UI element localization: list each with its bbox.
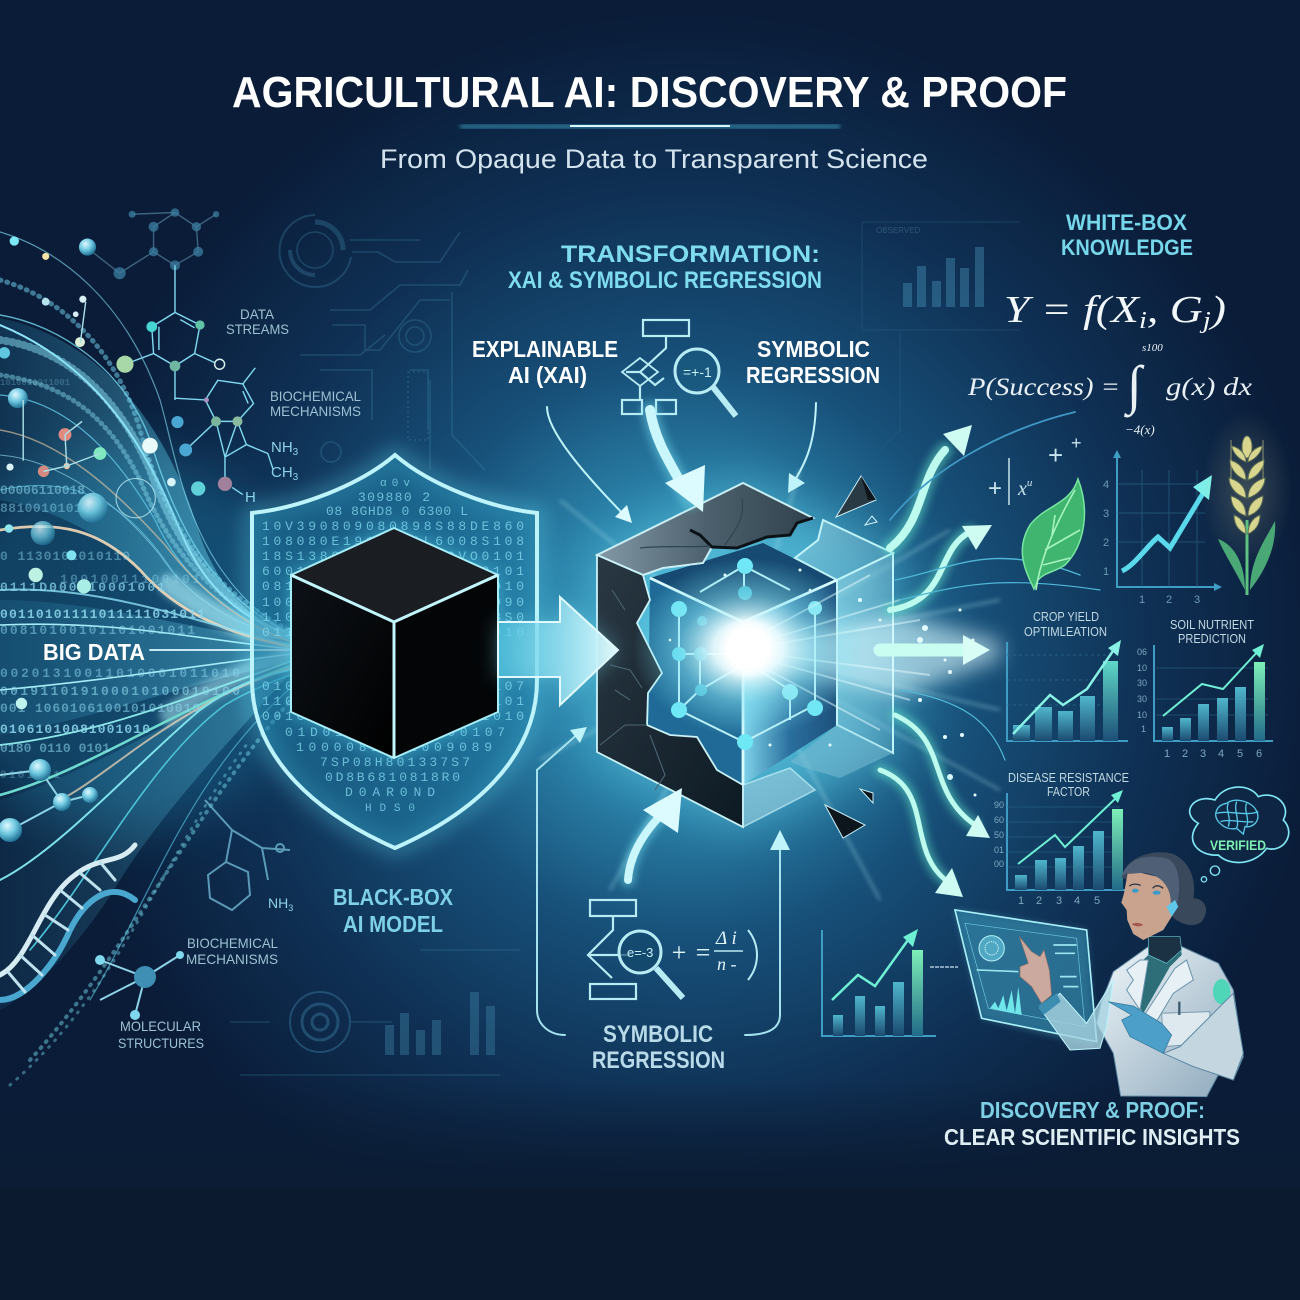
core left face — [648, 578, 743, 785]
chart: growth line with numbers: 3 — [1103, 508, 1109, 520]
ear piece — [1167, 900, 1178, 917]
shield code text: 1 1 0 1 0 0 1 0 1 1 0 1 0 1 0 1 1 0 1 0 B S 0 — [262, 610, 524, 625]
chart: lower center growth — [822, 929, 958, 1036]
label: biochemical mechanisms upper — [270, 388, 361, 419]
shield code text: 1 0 8 0 8 0 E 1 9 1 8 1 0 1 L 6 0 0 8 S 1 0 8 — [262, 534, 524, 549]
flying shards — [825, 476, 877, 838]
heading: discovery and proof: CLEAR SCIENTIFIC INSIGHTS — [944, 1124, 1240, 1150]
chart: growth line with numbers: 1 — [1103, 566, 1109, 578]
icon: flowchart with magnifier bottom and formula: n - — [717, 954, 736, 974]
shield code text: 6 0 0 1 1 0 1 0 1 1 0 1 1 0 0 1 1 D 0 0 1 0 1 — [262, 564, 524, 579]
binary data rows: 00201310011010001011010 — [0, 666, 240, 681]
arrows: outgoing green — [880, 412, 1100, 897]
label: data streams: DATA — [240, 306, 275, 322]
chart: growth line with numbers: 1 — [1139, 594, 1145, 606]
chart: soil nutrient prediction: 2 — [1182, 748, 1188, 760]
chart: growth line with numbers: 2 — [1103, 537, 1109, 549]
label: molecular structures: MOLECULAR — [120, 1018, 201, 1034]
verified thought cloud — [1190, 787, 1289, 882]
shield code text: 0 1 0 1 1 0 0 1 0 1 1 0 1 0 1 0 0 1 1 0 1 0 7 — [262, 679, 524, 694]
blue glove — [1108, 1002, 1172, 1053]
shield code text: 0 D 8 B 6 8 1 0 8 1 8 R 0 — [325, 770, 460, 785]
binary data rows: 10010011100101 — [60, 572, 200, 587]
label: symbolic regression upper: REGRESSION — [746, 362, 880, 388]
black cube glow — [291, 528, 498, 758]
DNA helix — [0, 845, 135, 1000]
network nodes — [671, 558, 823, 750]
cube outer glow — [597, 483, 893, 827]
label: molecular structures — [118, 1018, 204, 1051]
chart: growth line with numbers: 4 — [1103, 479, 1109, 491]
central breaking cube — [540, 470, 1000, 900]
heading: discovery and proof: DISCOVERY & PROOF: — [980, 1097, 1205, 1123]
label: symbolic regression upper: SYMBOLIC — [757, 336, 870, 362]
equation: Y = f(Xi, Gj): ) — [1208, 289, 1226, 331]
sparks — [669, 568, 976, 796]
chemical labels NH3 CH3 H: NH — [271, 439, 293, 456]
binary data rows: 0101001 — [0, 770, 60, 782]
chart: disease resistance factor: 00 — [994, 859, 1004, 869]
binary data rows: 88100101010 — [0, 501, 90, 516]
binary data rows — [0, 378, 240, 782]
shield code text: 1 0 0 0 0 8 1 1 0 1 0 0 9 0 8 9 — [296, 740, 492, 755]
math symbols: + — [1048, 440, 1063, 470]
lower hex molecule — [205, 800, 290, 910]
equation: P(Success) integral: ∫ — [1124, 355, 1145, 418]
faint concentric gauge and chart bottom — [230, 950, 520, 1075]
math symbols: + — [988, 475, 1002, 502]
equation: P(Success) integral: P(Success) = — [967, 374, 1120, 401]
label: data streams — [226, 306, 289, 337]
chart: crop yield optimization: OPTIMLEATION — [1024, 625, 1107, 639]
label: biochemical mechanisms lower — [186, 935, 278, 967]
label: biochemical mechanisms lower: MECHANISMS — [186, 951, 278, 967]
heading: white-box knowledge: WHITE-BOX — [1066, 210, 1187, 235]
chart: disease resistance factor: 5 — [1094, 895, 1100, 907]
chemical labels NH3 CH3 H: H — [245, 489, 256, 506]
binary data rows: 00006110018 — [0, 483, 85, 498]
burst core — [722, 622, 774, 674]
glass top facet — [795, 520, 893, 580]
chart: soil nutrient prediction: 10 — [1137, 710, 1147, 720]
icon: leaf — [1022, 479, 1084, 590]
shield code text: 1 8 S 1 3 8 0 1 0 1 1 1 1 1 0 D 3 V O 0 1 0 1 — [262, 549, 524, 564]
binary data rows: 00810100101101001011 — [0, 623, 195, 638]
chart: crop yield optimization — [1007, 610, 1128, 741]
chemical labels NH3 CH3 H — [245, 439, 299, 506]
title: AGRICULTURAL AI: DISCOVERY & PROOF — [232, 68, 1067, 117]
shield code text: 0 1 1 0 1 0 1 1 0 0 1 0 1 1 0 1 0 0 1 1 0 1 0 — [262, 625, 524, 640]
radiating light rays — [540, 470, 1000, 900]
chart: soil nutrient prediction: 1 — [1141, 724, 1146, 734]
chart: growth line with numbers: 3 — [1194, 594, 1200, 606]
glass right facet — [837, 553, 893, 753]
heading: discovery and proof — [944, 1097, 1240, 1150]
label: explainable AI — [472, 336, 618, 388]
heading: transformation: XAI & SYMBOLIC REGRESSION — [508, 267, 822, 294]
binary data rows: 00110101111011111031011 — [0, 607, 205, 622]
title glow divider — [460, 125, 840, 128]
shield code text: 08 8GHD8 0 6300 L — [326, 504, 468, 519]
lab coat — [1097, 947, 1243, 1097]
label: explainable AI: AI (XAI) — [508, 362, 587, 388]
label NH2: NH — [268, 895, 288, 911]
faint background chart top right — [862, 222, 1020, 450]
label: black-box AI model: BLACK-BOX — [333, 884, 454, 910]
label: symbolic regression lower — [592, 1021, 725, 1074]
chart: soil nutrient prediction: 06 — [1137, 647, 1147, 657]
chart: soil nutrient prediction: 30 — [1137, 678, 1147, 688]
chart: disease resistance factor: 01 — [994, 845, 1004, 855]
core top face — [650, 543, 837, 622]
chart: soil nutrient prediction: 5 — [1237, 748, 1243, 760]
subtitle: From Opaque Data to Transparent Science — [380, 144, 928, 174]
label: black-box AI model — [333, 884, 454, 937]
binary data rows: 0111D000110001001 — [0, 580, 165, 595]
equation: P(Success) integral — [967, 342, 1252, 437]
math symbols: + — [1071, 433, 1082, 453]
icon: flowchart with magnifier bottom and formula — [588, 900, 757, 999]
chart: soil nutrient prediction: PREDICTION — [1178, 632, 1246, 646]
shield code text: 309880 2 — [358, 490, 430, 505]
icon: brain — [1216, 800, 1258, 834]
pointing hand — [1019, 937, 1052, 1003]
right sleeve — [1163, 993, 1243, 1080]
shield code text: 1 0 V 3 9 0 8 0 9 0 8 0 8 9 8 S 8 8 D E 8 6 0 — [262, 519, 524, 534]
arrows: top inputs — [547, 403, 816, 523]
label: biochemical mechanisms lower: BIOCHEMICAL — [187, 935, 278, 951]
data flow streams — [0, 232, 300, 1085]
chart: soil nutrient prediction: 10 — [1137, 663, 1147, 673]
shield with black-box cube — [252, 455, 537, 848]
chemical labels NH3 CH3 H: 3 — [293, 472, 299, 483]
left face fine cracks — [600, 590, 665, 790]
chart: disease resistance factor: 50 — [994, 830, 1004, 840]
equation: Y = f(Xi, Gj): i — [1139, 308, 1147, 334]
lower left ball molecules — [0, 759, 184, 1020]
inner cube wireframe — [650, 566, 837, 785]
icon: flowchart with magnifier top: =+-1 — [683, 364, 712, 380]
label: biochemical mechanisms upper: BIOCHEMICAL — [270, 388, 361, 404]
equation: P(Success) integral: g(x) dx — [1166, 374, 1252, 401]
chart: soil nutrient prediction: 30 — [1137, 694, 1147, 704]
arrow: black box to cube — [498, 597, 618, 705]
horizontal ray beam — [745, 615, 1000, 695]
shield code text: α0v — [380, 478, 410, 490]
chart: growth line with numbers: 2 — [1166, 594, 1172, 606]
glass lower facet — [790, 725, 893, 778]
crack lines — [640, 498, 813, 548]
shield code text: 7 S P 0 8 H 8 0 1 3 3 7 S 7 — [320, 755, 470, 770]
chart: disease resistance factor: 3 — [1056, 895, 1062, 907]
equation: Y = f(Xi, Gj): Y = f(X — [1004, 289, 1116, 331]
chemical labels NH3 CH3 H: CH — [271, 464, 293, 481]
binary data rows: 0 1130101010110 — [0, 549, 130, 564]
label: symbolic regression lower: SYMBOLIC — [603, 1021, 713, 1048]
label NH2: 3 — [288, 903, 293, 913]
math symbols: u — [1027, 477, 1033, 489]
label: biochemical mechanisms upper: MECHANISMS — [270, 403, 361, 419]
chart: disease resistance factor: 1 — [1018, 895, 1024, 907]
chart: soil nutrient prediction: 6 — [1256, 748, 1262, 760]
label: big data: BIG DATA — [43, 639, 145, 665]
shield code text — [262, 478, 524, 815]
black cube — [291, 528, 498, 758]
label: explainable AI: EXPLAINABLE — [472, 336, 618, 362]
shield code text: D 0 A R 0 N D — [345, 785, 435, 800]
equation: P(Success) integral: −4(x) — [1125, 422, 1155, 437]
chart: growth line with numbers — [1103, 450, 1222, 606]
coat pocket and badge — [1162, 979, 1230, 1047]
chart: disease resistance factor: DISEASE RESISTANCE — [1008, 771, 1129, 785]
math symbols: x — [1018, 478, 1027, 500]
left sleeve — [1040, 980, 1113, 1050]
chart: soil nutrient prediction: 3 — [1200, 748, 1206, 760]
chemical labels NH3 CH3 H: 3 — [293, 447, 299, 458]
coat lapels — [1127, 960, 1193, 1027]
hair front sweep — [1122, 857, 1179, 908]
label: data streams: STREAMS — [226, 321, 289, 337]
heading: white-box knowledge — [1061, 210, 1193, 260]
math symbols — [988, 433, 1082, 505]
molecules lower left and DNA — [0, 759, 290, 1020]
heading: transformation: TRANSFORMATION: — [561, 241, 820, 268]
shield code text: 0 1 D 0 1 1 0 1 0 1 1 0 1 0 0 1 0 7 — [285, 725, 505, 740]
arrows: bottom inputs — [537, 727, 790, 1035]
equation: P(Success) integral: s100 — [1142, 342, 1163, 354]
icon: flowchart with magnifier bottom and formula: Δ i — [715, 928, 737, 949]
core right face — [743, 580, 837, 785]
heading: white-box knowledge: KNOWLEDGE — [1061, 235, 1193, 260]
chart: disease resistance factor: 2 — [1036, 895, 1042, 907]
label: symbolic regression lower: REGRESSION — [592, 1047, 725, 1074]
icon: flowchart with magnifier bottom and formula: + = — [670, 938, 712, 967]
label: symbolic regression upper — [746, 336, 880, 388]
chart: crop yield optimization: CROP YIELD — [1033, 610, 1099, 624]
binary data rows: 001911019100010100010100 — [0, 684, 240, 699]
faint circuit decor — [280, 215, 485, 470]
shield code text: 0 0 1 0 1 1 0 1 0 0 1 1 0 1 0 0 1 0 1 1 0 1 0 — [262, 709, 524, 724]
holographic tablet — [955, 910, 1097, 1047]
chart: disease resistance factor: 90 — [994, 800, 1004, 810]
icon: wheat — [1202, 410, 1292, 595]
central light burst — [633, 558, 863, 738]
chart: disease resistance factor: 4 — [1074, 895, 1080, 907]
fan of light rays — [750, 575, 930, 730]
chart: disease resistance factor — [994, 771, 1129, 907]
chart: disease resistance factor: FACTOR — [1047, 785, 1090, 799]
cracked top slab — [597, 483, 813, 575]
shield code text: 1 1 0 0 1 0 1 1 0 1 0 0 1 0 1 1 0 1 0 0 1 0 1 — [262, 694, 524, 709]
cracked dark left face — [597, 555, 743, 827]
label: molecular structures: STRUCTURES — [118, 1035, 204, 1051]
shield code text: 1 0 0 0 1 1 0 1 0 1 1 0 0 1 1 0 1 0 1 0 0 9 0 — [262, 595, 524, 610]
binary data rows: 001 1060106100101010010 — [0, 701, 200, 716]
hair back and bun — [1122, 852, 1206, 925]
shield code text: 0 8 1 1 0 1 1 0 1 0 0 1 0 1 1 0 0 1 1 0 0 1 0 — [262, 579, 524, 594]
equation: Y = f(Xi, Gj): j — [1199, 308, 1211, 334]
chart: soil nutrient prediction — [1137, 618, 1273, 760]
chart: disease resistance factor: 60 — [994, 815, 1004, 825]
equation: Y = f(Xi, Gj): , G — [1147, 289, 1203, 331]
turtleneck and inner shirt — [1133, 937, 1182, 1013]
icon: flowchart with magnifier bottom and formula: e=-3 — [627, 945, 653, 960]
face — [1121, 870, 1177, 940]
label: black-box AI model: AI MODEL — [343, 911, 443, 937]
icon: flowchart with magnifier top — [622, 320, 736, 416]
molecule: upper left cluster — [0, 208, 273, 709]
chart: soil nutrient prediction: SOIL NUTRIENT — [1170, 618, 1254, 632]
binary data rows: 1010010011001 — [0, 378, 71, 388]
eyes, brow and lips — [1129, 884, 1163, 926]
chart: soil nutrient prediction: 4 — [1218, 748, 1224, 760]
label: verified: VERIFIED — [1210, 837, 1266, 853]
scientist with holographic tablet — [955, 852, 1243, 1097]
chart: soil nutrient prediction: 1 — [1164, 748, 1170, 760]
binary data rows: 01061010081001010 — [0, 722, 150, 737]
binary data rows: 0180 0110 0101 — [0, 741, 110, 756]
heading: transformation — [508, 241, 822, 294]
shield code text: H D S 0 — [365, 803, 415, 815]
faint background chart top right: OBSERVED — [876, 226, 921, 235]
